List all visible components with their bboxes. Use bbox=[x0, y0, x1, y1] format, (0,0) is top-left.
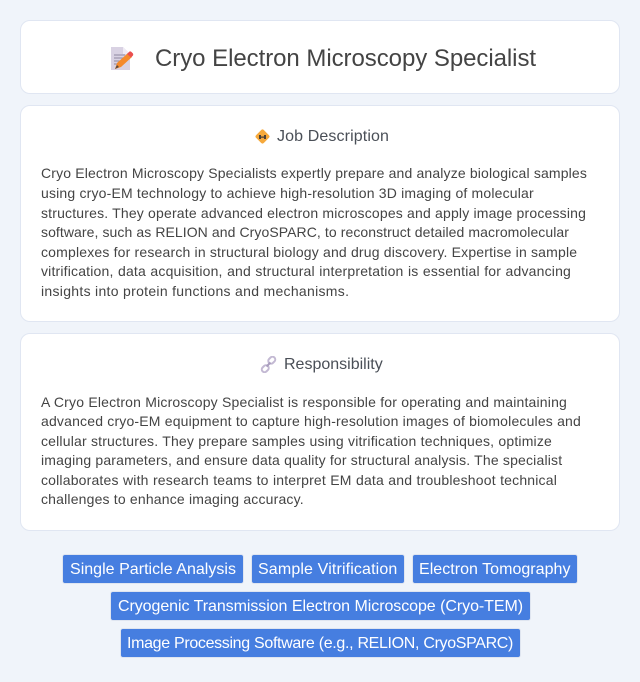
text block: job description: using cryo-EM technology to achieve high-resolution 3D imaging of molecular bbox=[41, 185, 534, 201]
tag: cryo-TEM: Cryogenic Transmission Electron Microscope (Cryo-TEM) bbox=[118, 598, 523, 615]
text block: responsibility: collaborates with research teams to interpret EM data and troubleshoot technical bbox=[41, 472, 557, 488]
text block: responsibility: challenges to enhance imaging accuracy. bbox=[41, 491, 304, 507]
text block: responsibility: A Cryo Electron Microscopy Specialist is responsible for operating and maintaining bbox=[41, 394, 567, 410]
text block: job description: vitrification, data acquisition, and structural interpretation is essential for advancing bbox=[41, 263, 571, 279]
heading: responsibility: Responsibility bbox=[284, 356, 383, 373]
heading: job description: Job Description bbox=[277, 128, 389, 145]
text block: job description: structures. They operate advanced electron microscopes and apply image processing bbox=[41, 205, 586, 221]
tag: image processing software: Image Processing Software (e.g., RELION, CryoSPARC) bbox=[127, 635, 513, 652]
title: Cryo Electron Microscopy Specialist bbox=[155, 45, 536, 72]
tag: cryo-TEM bbox=[110, 591, 531, 621]
text block: job description: insights into protein functions and mechanisms. bbox=[41, 283, 349, 299]
text block: job description: Cryo Electron Microscopy Specialists expertly prepare and analyze biological samples bbox=[41, 165, 587, 181]
tag: single particle analysis: Single Particle Analysis bbox=[70, 561, 236, 578]
text block: responsibility bbox=[41, 394, 581, 507]
panel: title card bbox=[20, 20, 620, 94]
text block: job description bbox=[41, 165, 587, 299]
tag: electron tomography bbox=[412, 554, 578, 584]
panel: job description bbox=[20, 105, 620, 322]
tag: sample vitrification bbox=[251, 554, 405, 584]
tag: single particle analysis bbox=[62, 554, 244, 584]
text block: responsibility: advanced cryo-EM equipment to capture high-resolution images of biomolecules and bbox=[41, 413, 581, 429]
icon: document with pencil bbox=[111, 47, 134, 70]
text block: responsibility: cellular structures. They prepare samples using vitrification techniques, optimize bbox=[41, 433, 552, 449]
tag: sample vitrification: Sample Vitrification bbox=[258, 561, 397, 578]
tag: image processing software bbox=[120, 628, 521, 658]
icon: chain link bbox=[260, 356, 276, 373]
text block: job description: complexes for research in structural biology and drug discovery. Expertise in sample bbox=[41, 244, 577, 260]
text block: job description: software, such as RELION and CryoSPARC, to reconstruct detailed macromolecular bbox=[41, 224, 569, 240]
panel: responsibility bbox=[20, 333, 620, 531]
tag: electron tomography: Electron Tomography bbox=[419, 561, 570, 578]
icon: diamond sign bbox=[256, 129, 270, 144]
text block: responsibility: imaging parameters, and ensure data quality for structural analysis. The specialist bbox=[41, 452, 562, 468]
